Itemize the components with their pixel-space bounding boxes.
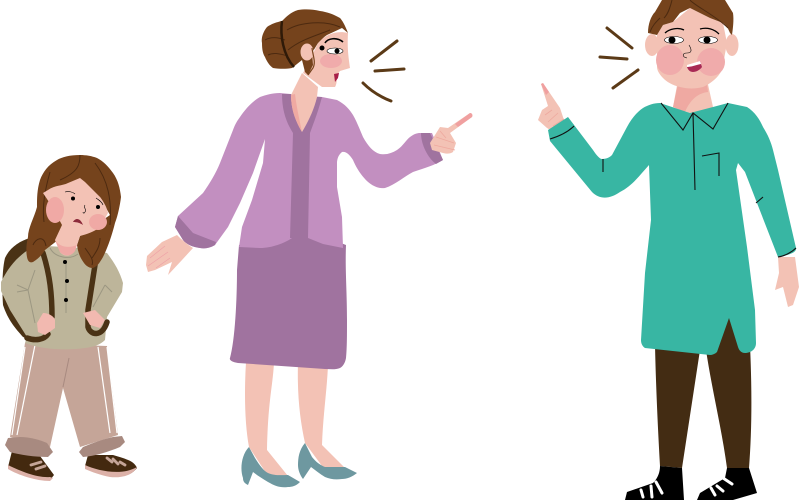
mother eye and mouth [320,39,343,82]
child trousers [10,343,118,447]
mother placket and collar [282,94,322,238]
mother shoes [241,447,300,487]
child hands [37,313,55,335]
father blush [656,45,684,75]
backpack [2,238,50,340]
father shirt [548,103,796,355]
mother blouse [175,93,443,248]
speech lines: mother [363,41,404,101]
child sweater buttons [63,260,69,302]
figure: father [538,0,799,500]
child sweater [1,246,123,349]
mother ear [300,44,314,60]
figure: child with backpack [1,155,137,481]
father hand lowered [775,257,799,307]
figure: mother [146,9,472,487]
mother right cuff [421,133,443,164]
father hand raised [538,83,565,130]
father hair [648,0,733,35]
father ears [645,34,659,56]
child blush [46,197,64,223]
mother left cuff [175,216,216,248]
child eyes and mouth [65,192,103,225]
mother face [303,32,350,87]
mother legs [245,362,345,476]
mother pointing hand [430,113,472,154]
mother blush [320,54,342,68]
father neck [673,80,713,113]
child face [43,178,108,256]
father eyes, nose and mouth [664,28,719,72]
mother open hand [146,235,193,275]
father face [657,8,727,88]
mother hair [262,9,348,75]
father shoes [625,466,757,500]
child backpack straps [27,253,107,340]
mother neck [291,73,318,132]
speech lines: father [600,28,638,88]
father shirt lines [550,103,796,257]
mother skirt [230,232,347,369]
child shoes [8,451,54,480]
child trouser cuffs [5,437,53,457]
child hair [26,155,121,268]
father trousers [655,315,751,468]
